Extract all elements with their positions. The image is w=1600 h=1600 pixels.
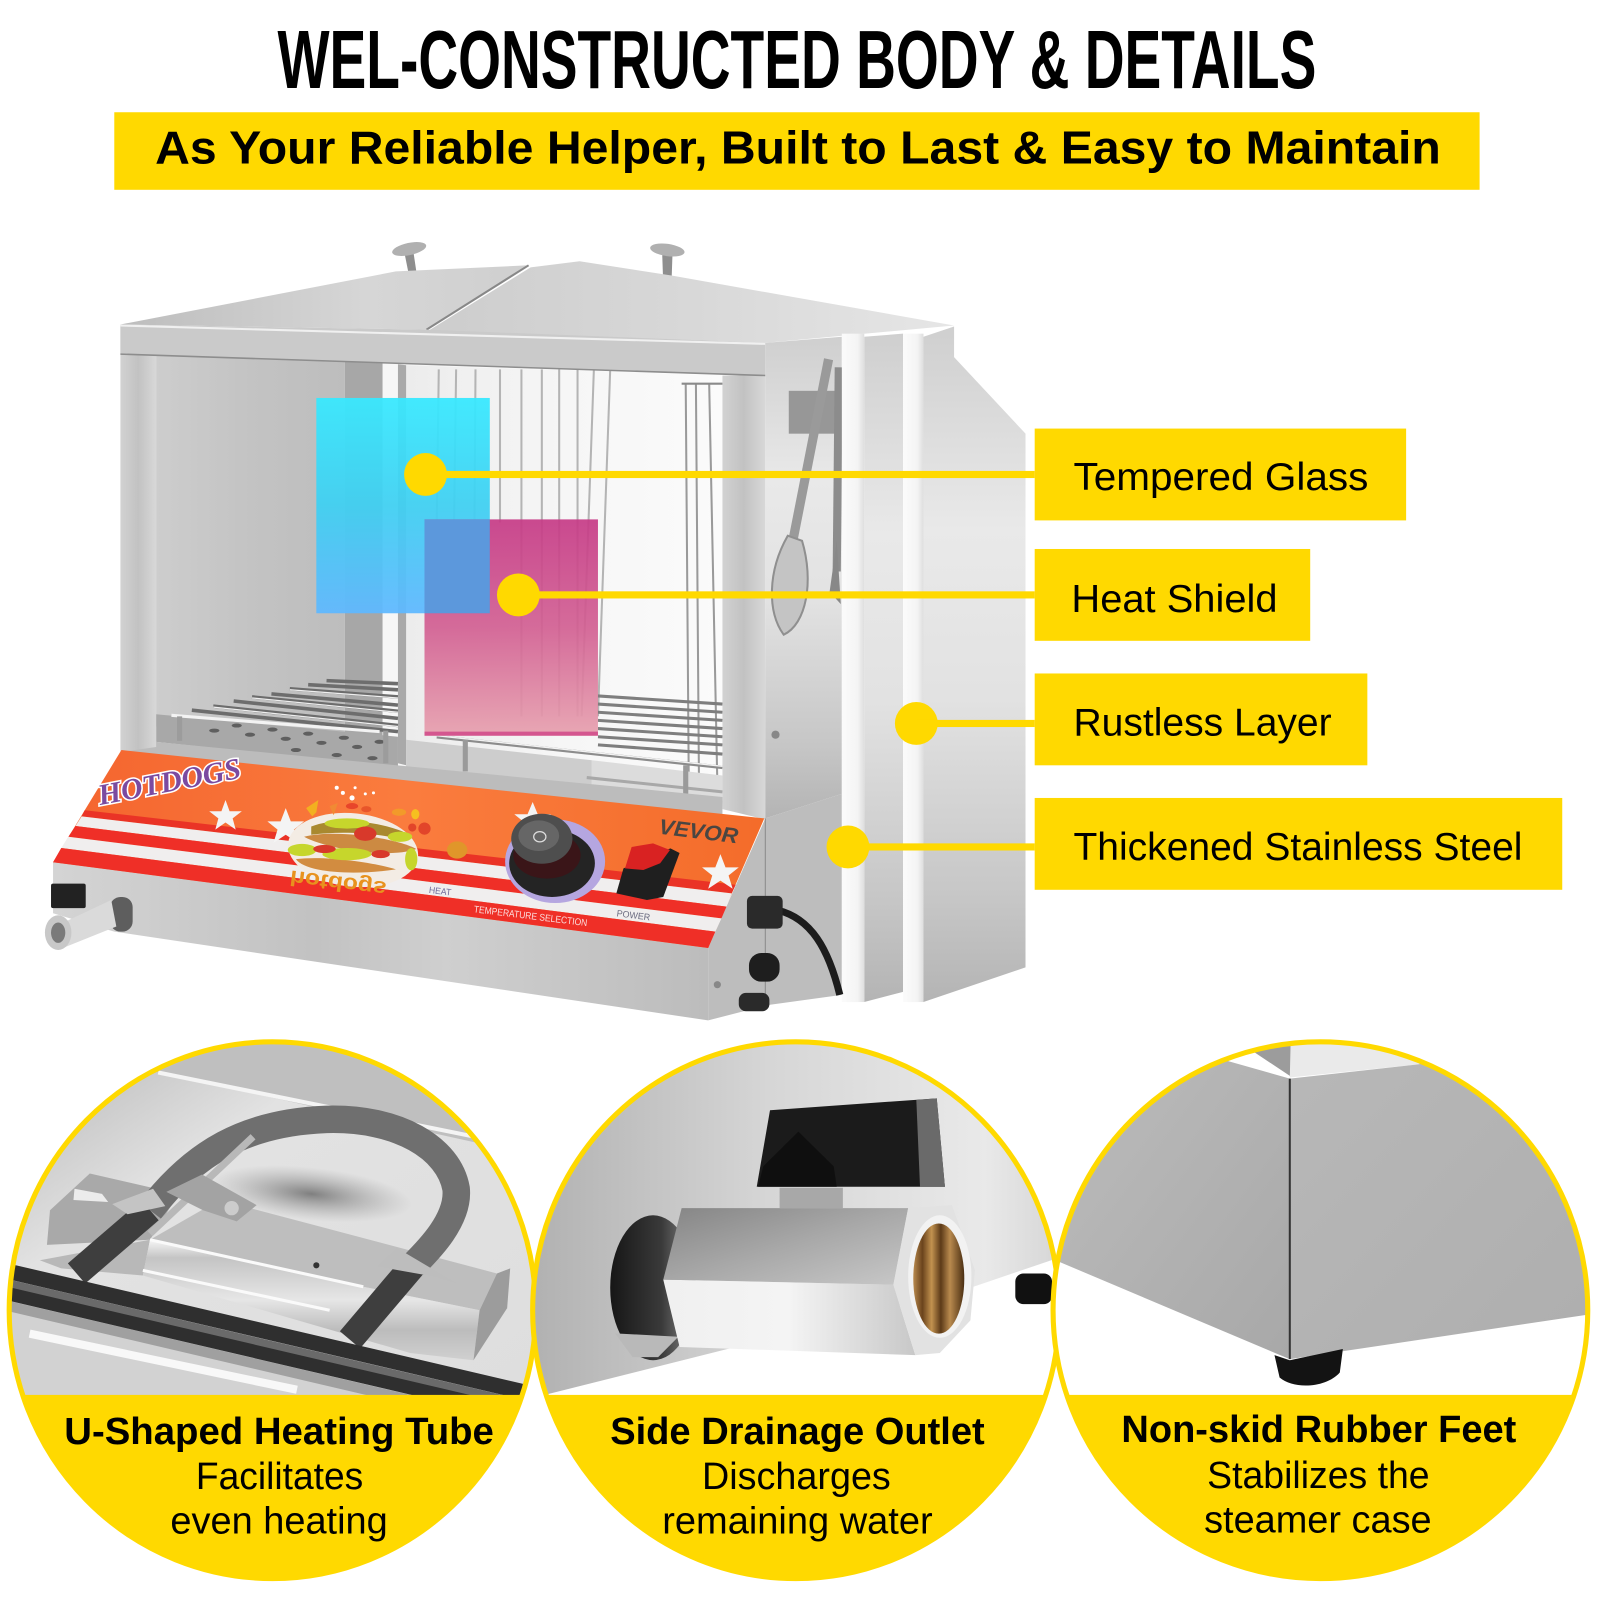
- hot dog graphic: [284, 807, 422, 901]
- heading: Side Drainage Outlet: [610, 1410, 985, 1452]
- detail circle: heating tube: [0, 1031, 551, 1589]
- description: even heating: [170, 1500, 388, 1542]
- callout: heat shield: [497, 549, 1310, 641]
- control panel: [0, 429, 1597, 1589]
- heading: Non-skid Rubber Feet: [1121, 1408, 1517, 1450]
- description: steamer case: [1204, 1499, 1432, 1541]
- circle outline: [533, 1042, 1059, 1579]
- tray: [47, 1173, 179, 1245]
- power switch: [616, 843, 680, 900]
- probe and clamps: [150, 1137, 253, 1234]
- subtitle banner: As Your Reliable Helper, Built to Last & Easy to Maintain: [155, 121, 1441, 173]
- callout: thickened stainless steel: [827, 798, 1562, 890]
- front beam and posts: [120, 324, 765, 819]
- callout: heat shield: Heat Shield: [1071, 578, 1278, 621]
- panel logo: HOTDOGS: [94, 753, 244, 812]
- power cord and plug: [714, 896, 840, 1011]
- side panel and tongs: [708, 337, 842, 1020]
- roof panels: [120, 261, 954, 343]
- rustless and stainless side layers: [842, 327, 1026, 1002]
- inverted hotdogs lettering: hotdogs: [289, 865, 388, 901]
- yellow text area: [548, 1394, 1043, 1576]
- circle outline: [9, 1042, 536, 1579]
- indicator lamp: [447, 841, 467, 859]
- description: [662, 1455, 933, 1542]
- yellow text area: [25, 1394, 520, 1576]
- callout: rustless layer: [895, 673, 1367, 765]
- panel text labels: HEAT: [428, 885, 452, 898]
- decorative sparks: [306, 786, 431, 835]
- description: remaining water: [662, 1500, 933, 1542]
- pink highlight panel: [424, 519, 598, 736]
- callout: rustless layer: Rustless Layer: [1073, 702, 1332, 745]
- panel text labels: POWER: [616, 908, 651, 922]
- blue highlight panel: [316, 398, 490, 613]
- rails: [12, 1302, 408, 1373]
- panel text labels: [428, 885, 651, 929]
- front lip: [121, 742, 722, 816]
- centre floor and right rack: [406, 696, 722, 806]
- detail circle: drainage outlet: [526, 1036, 1066, 1589]
- panel stars: [209, 800, 739, 889]
- callout: tempered glass: Tempered Glass: [1073, 456, 1368, 499]
- valve photo: [526, 1036, 1066, 1403]
- description: Facilitates: [196, 1455, 363, 1497]
- description: [1204, 1454, 1432, 1541]
- subtitle banner: [114, 112, 1480, 190]
- description: [170, 1455, 388, 1542]
- lid knobs: [391, 239, 685, 285]
- viewing chamber: [121, 355, 722, 816]
- left floor and rack: [156, 681, 398, 767]
- heating tube photo: [12, 1044, 532, 1395]
- temperature dial: [505, 814, 605, 903]
- yellow text area: [1069, 1394, 1572, 1576]
- description: Stabilizes the: [1207, 1454, 1430, 1496]
- inner rods: [437, 369, 722, 784]
- circle outline: [1053, 1042, 1588, 1579]
- callout: thickened stainless steel: Thickened Stainless Steel: [1073, 826, 1522, 869]
- panel text labels: TEMPERATURE SELECTION: [473, 904, 588, 929]
- U tube: [150, 1119, 456, 1265]
- feet photo: [1056, 1044, 1586, 1386]
- description: Discharges: [702, 1455, 891, 1497]
- VEVOR logo: VEVOR: [658, 815, 740, 848]
- drain valve: [45, 884, 133, 950]
- detail circle: rubber feet: [1049, 1036, 1597, 1589]
- heading: U-Shaped Heating Tube: [64, 1410, 494, 1452]
- base box: [53, 862, 708, 1020]
- callout: tempered glass: [404, 429, 1406, 520]
